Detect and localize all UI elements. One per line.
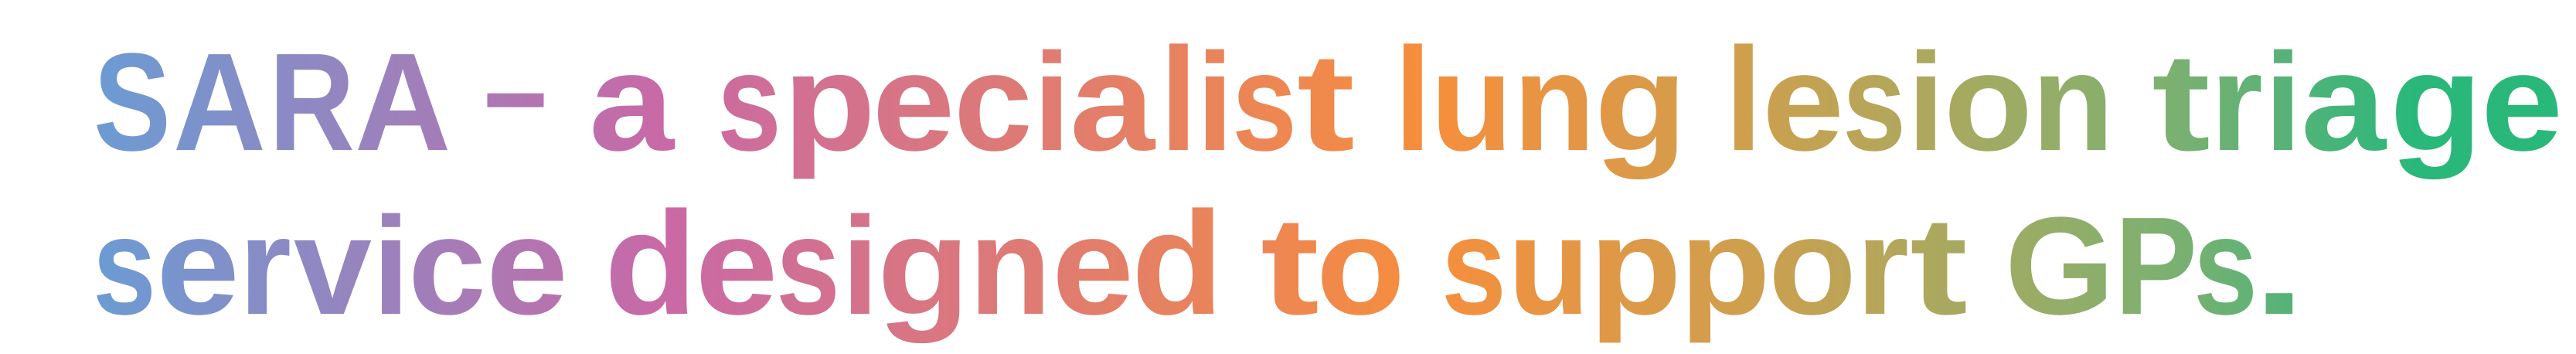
title line 2: e: [156, 189, 240, 344]
title line 2: e: [486, 189, 568, 344]
title line 2: s: [1441, 189, 1506, 344]
title line 1: a: [1070, 25, 1156, 180]
title line 2: v: [294, 189, 372, 344]
title line 1: s: [717, 25, 781, 180]
title line 1: i: [2265, 25, 2302, 180]
title line 1: i: [1907, 25, 1945, 180]
title line 1: A: [355, 25, 448, 180]
title line 2: .: [2253, 189, 2305, 344]
title line 1: s: [1232, 25, 1297, 180]
title line 1: e: [1762, 25, 1844, 180]
title line 2: t: [1910, 189, 1968, 344]
title line 2: d: [604, 182, 697, 345]
title line 1: l: [1394, 18, 1431, 182]
title line 1: S: [94, 25, 171, 180]
title line 1: t: [1297, 25, 1355, 180]
title line 2: n: [969, 189, 1051, 344]
title line 2: p: [1679, 189, 1771, 344]
title line 2: p: [1589, 189, 1682, 344]
title line 1: i: [1033, 25, 1070, 180]
title line 1: A: [173, 25, 266, 180]
title line 1: a: [2301, 25, 2387, 180]
title line 1: p: [783, 25, 876, 180]
title line 2: d: [1131, 182, 1223, 345]
title line 2: s: [2193, 189, 2258, 344]
title line 2: s: [93, 189, 156, 344]
title line 2: i: [373, 189, 410, 344]
title line 1: e: [872, 25, 955, 180]
title line 2: G: [2005, 189, 2115, 344]
title line 1: R: [269, 25, 355, 180]
title line 1: n: [2032, 25, 2114, 180]
title line 2: i: [842, 189, 879, 344]
title line 2: g: [877, 189, 970, 344]
title line 1: c: [954, 25, 1033, 180]
title line 2: u: [1508, 189, 1590, 344]
title line 2: o: [1768, 189, 1856, 344]
title line 2: e: [696, 189, 778, 344]
title line 2: o: [1316, 189, 1405, 344]
title line 1: u: [1431, 25, 1513, 180]
title line 1: i: [1196, 25, 1234, 180]
title line 1: –: [484, 12, 547, 168]
title line 2: c: [408, 189, 486, 344]
title line 2: e: [1052, 189, 1134, 344]
title line 1: r: [2210, 25, 2263, 180]
title line 1: e: [2481, 25, 2563, 180]
title line 1: g: [1594, 25, 1687, 180]
title line 2: s: [776, 189, 840, 344]
title line 1: o: [1944, 25, 2033, 180]
title line 2: r: [1856, 189, 1909, 344]
title line 1: l: [1160, 18, 1197, 182]
title line 1: n: [1513, 25, 1595, 180]
title line 1: l: [1725, 18, 1762, 182]
title line 1: g: [2390, 25, 2482, 180]
title line 2: t: [1261, 189, 1319, 344]
title line 1: a: [589, 25, 675, 180]
title line 1: t: [2152, 25, 2210, 180]
title line 2: r: [239, 189, 291, 344]
title line 1: s: [1843, 25, 1906, 180]
title line 2: P: [2115, 189, 2197, 344]
